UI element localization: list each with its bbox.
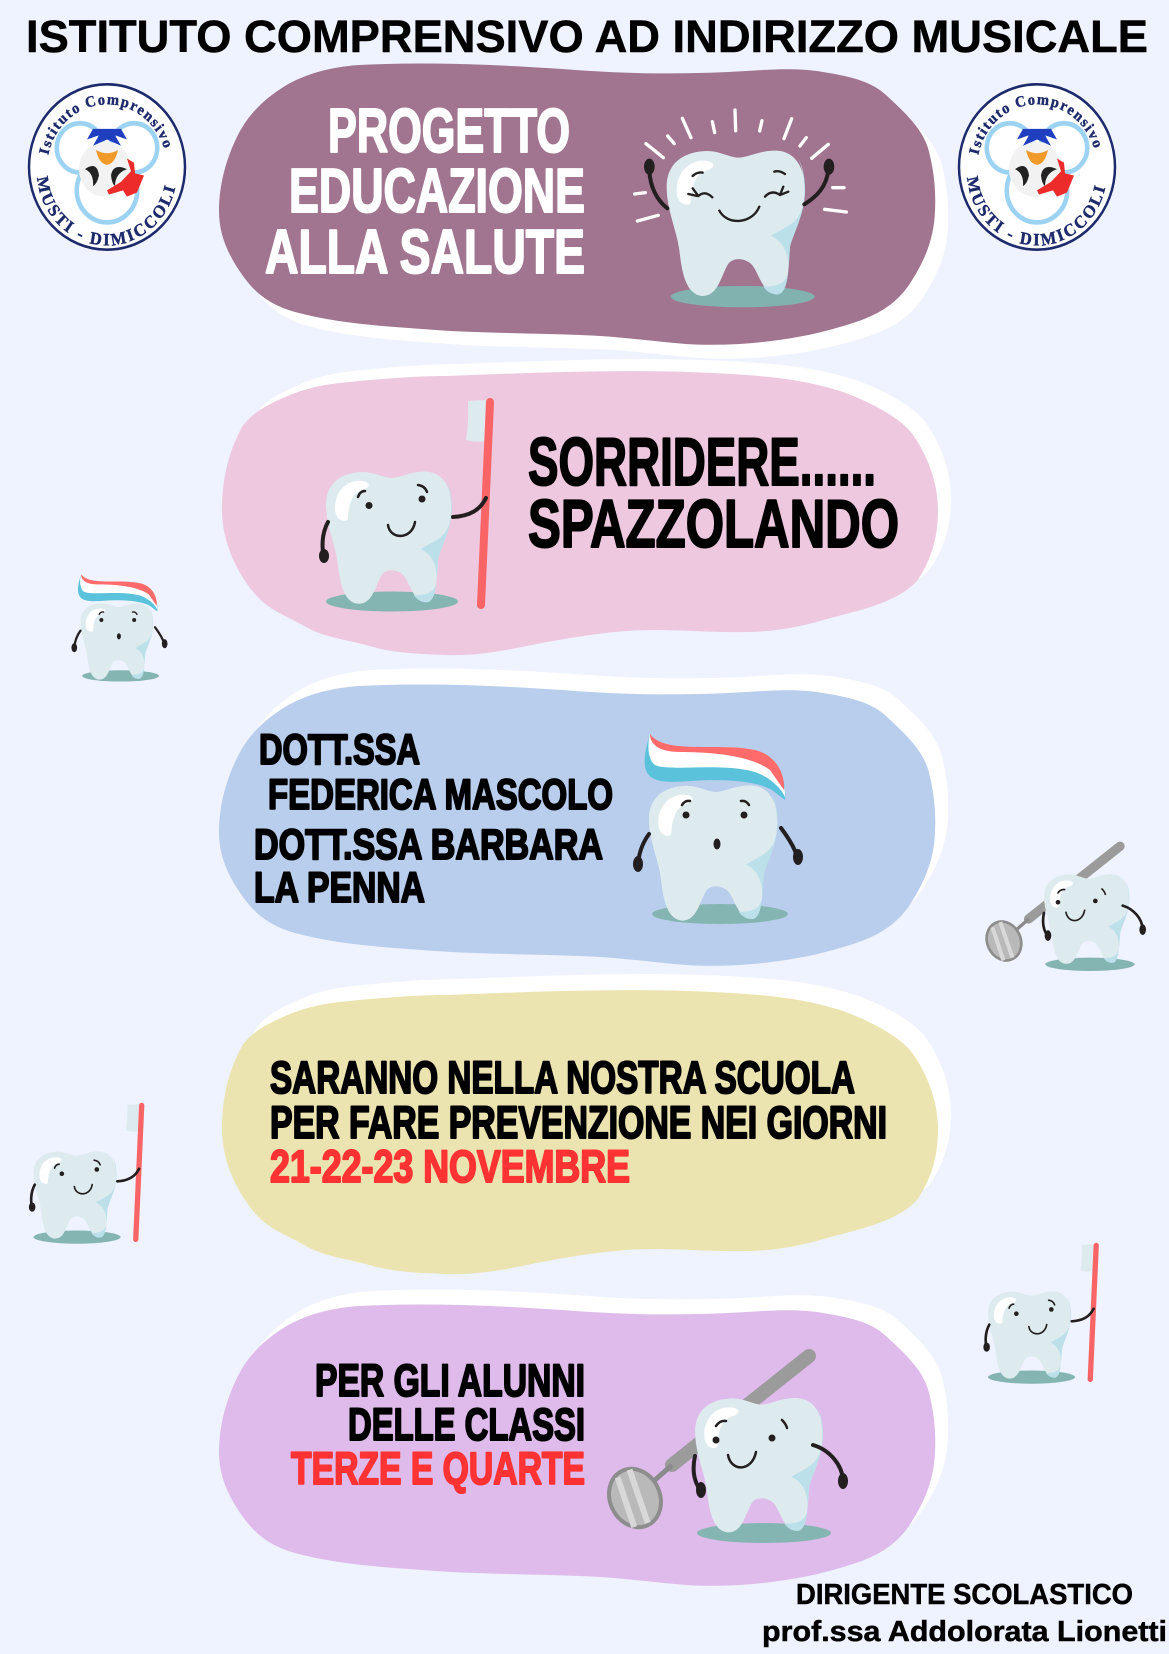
icon: tooth with toothbrush xyxy=(319,400,490,612)
icon: tooth with toothpaste xyxy=(633,734,803,924)
heading: project name: EDUCAZIONE xyxy=(289,157,585,226)
heading: project name xyxy=(265,97,585,287)
panel: project title xyxy=(219,64,948,359)
panel: slogan xyxy=(222,359,951,655)
panel: dates xyxy=(222,974,951,1274)
text: visit announcement: PER FARE PREVENZIONE NEI GIORNI xyxy=(270,1097,887,1148)
icon: small tooth with toothpaste xyxy=(71,574,167,682)
text: doctors names xyxy=(254,726,613,912)
text: visit announcement: 21-22-23 NOVEMBRE xyxy=(270,1141,630,1192)
text: doctors names: FEDERICA MASCOLO xyxy=(268,771,613,819)
text: principal signature xyxy=(762,1579,1167,1648)
heading: project name: PROGETTO xyxy=(328,97,570,166)
icon: small tooth with toothbrush, right xyxy=(983,1244,1096,1384)
title: ISTITUTO COMPRENSIVO AD INDIRIZZO MUSICALE xyxy=(26,11,1148,62)
text: target classes xyxy=(291,1355,585,1494)
text: principal signature: DIRIGENTE SCOLASTICO xyxy=(796,1579,1133,1611)
logo: right school crest xyxy=(958,83,1116,251)
text: visit announcement: SARANNO NELLA NOSTRA SCUOLA xyxy=(270,1052,855,1103)
panel: doctors xyxy=(219,669,948,966)
logo: right school crest: Istituto Comprensivo xyxy=(968,96,1100,156)
text: doctors names: LA PENNA xyxy=(254,864,425,912)
logo: left school crest: MUSTI - DIMICCOLI xyxy=(36,175,176,246)
text: target classes: PER GLI ALUNNI xyxy=(315,1355,585,1406)
logo: right school crest: MUSTI - DIMICCOLI xyxy=(966,175,1106,246)
text: doctors names: DOTT.SSA xyxy=(259,726,420,774)
heading: project name: ALLA SALUTE xyxy=(265,218,585,287)
heading: slogan text: SORRIDERE...... xyxy=(528,424,876,500)
icon: small tooth with toothbrush, left xyxy=(29,1104,142,1244)
heading: slogan text: SPAZZOLANDO xyxy=(528,486,899,562)
panel: audience xyxy=(219,1290,948,1586)
heading: slogan text xyxy=(528,424,899,562)
text: target classes: TERZE E QUARTE xyxy=(291,1443,585,1494)
text: target classes: DELLE CLASSI xyxy=(348,1399,585,1450)
text: visit announcement xyxy=(270,1052,887,1192)
logo: left school crest: Istituto Comprensivo xyxy=(38,96,170,156)
icon: tooth with dental mirror xyxy=(600,1356,848,1543)
text: doctors names: DOTT.SSA BARBARA xyxy=(254,821,603,869)
icon: small tooth with dental mirror xyxy=(980,846,1146,971)
logo: left school crest xyxy=(28,83,186,251)
text: principal signature: prof.ssa Addolorata Lionetti xyxy=(762,1616,1167,1648)
icon: happy tooth xyxy=(635,110,846,307)
